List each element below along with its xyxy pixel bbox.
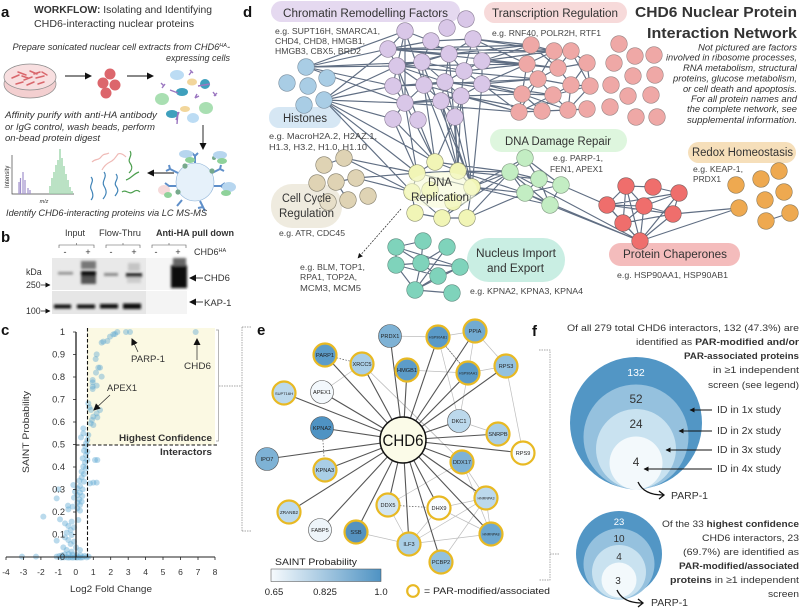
top description: screen (see legend) [708, 380, 799, 390]
panel letter d: d [243, 4, 252, 21]
x axis labels: 3 [126, 567, 131, 577]
arrow: nuclei to extract [127, 75, 153, 77]
bottom description: CHD6 interactors, 23 [702, 533, 799, 543]
SAINT probability legend: 1.0 [374, 587, 388, 598]
node labels: HMGB1 [397, 368, 417, 374]
nodes: nucleus import and export [388, 233, 468, 301]
bottom description [662, 519, 799, 599]
x axis labels: 5 [161, 567, 166, 577]
callouts: Interactors [160, 447, 212, 457]
column headers: CHD6 [194, 247, 219, 257]
node labels: ILF3 [403, 542, 415, 548]
network note: the complete network, see [687, 104, 797, 114]
callouts [94, 339, 212, 457]
node labels: ZRANB2 [280, 510, 299, 515]
bracket to panel e [216, 327, 252, 531]
panel d: interaction network [243, 1, 798, 301]
node labels: PPIA [469, 329, 482, 335]
example protein lists: RPA1, TOP2A, [300, 273, 357, 282]
nested circles: all interactors [570, 357, 702, 490]
nested circles: all interactors: 52 [629, 392, 643, 406]
node labels: XRCC5 [353, 362, 371, 368]
arrow: dish to cells [65, 75, 91, 77]
nodes: protein chaperones [599, 178, 687, 249]
network note: or cell death and apoptosis. [683, 84, 797, 94]
category labels: DNA Damage Repair [505, 136, 611, 148]
arrow: beads to peptides [148, 172, 174, 174]
blot labels: kDa [26, 267, 42, 277]
category labels: Nucleus Import [476, 248, 557, 260]
nested circles: all interactors: 4 [633, 455, 640, 469]
chart: mass spectrum: m/z [40, 199, 49, 205]
x axis labels: -3 [20, 567, 27, 577]
node labels [261, 329, 530, 566]
network edges [306, 31, 790, 293]
step 2 text: Affinity purify with anti-HA antibody [4, 110, 158, 120]
panel f: PAR overlap [532, 323, 799, 609]
category labels: Replication [411, 192, 469, 204]
PARP-1 arrow bottom [617, 590, 688, 609]
x axis labels: 0 [73, 567, 78, 577]
example protein lists: e.g. RNF40, POLR2H, RTF1 [492, 29, 601, 38]
panel a: workflow [1, 4, 236, 218]
node labels: HSP90AB1 [429, 336, 447, 340]
node labels: PRDX1 [381, 334, 399, 340]
bottom description: Of the 33 highest confidence [662, 519, 799, 529]
x axis labels: 2 [108, 567, 113, 577]
column headers: Input [65, 228, 86, 238]
PAR-modified legend: = PAR-modified/associated [424, 586, 550, 597]
nested circles: all interactors: 132 [627, 367, 645, 379]
blot: KAP-1 [52, 291, 187, 314]
column headers: + [175, 247, 181, 257]
PARP-1 arrow top: PARP-1 [671, 490, 708, 502]
column headers: Flow-Thru [99, 228, 141, 238]
node labels: RPS9 [516, 451, 530, 457]
node labels: KPNA3 [316, 468, 334, 474]
blot labels [26, 267, 231, 316]
x axis labels: -4 [2, 567, 10, 577]
example protein lists [269, 27, 743, 296]
axes and ticks [6, 332, 215, 560]
nodes: DNA replication [404, 154, 480, 226]
category labels: DNA [428, 177, 452, 189]
top description: identified as PAR-modified and/or [636, 337, 799, 347]
node labels: DDX17 [453, 460, 471, 466]
nested circles: all interactors: 24 [629, 417, 643, 431]
node labels: DDX5 [381, 503, 395, 509]
x axis labels [2, 567, 218, 577]
blot: CHD6 [52, 258, 187, 290]
example protein lists: e.g. MacroH2A.2, H2AZ.1, [269, 132, 377, 141]
x axis labels: 7 [196, 567, 201, 577]
y axis labels: 0 [60, 552, 65, 562]
column headers: + [131, 247, 137, 257]
arrow: DNA replication examples [358, 209, 401, 258]
protein nodes [256, 324, 470, 542]
network note: proteins, glucose metabolism, [672, 74, 797, 84]
arrow: extract to beads [202, 125, 204, 149]
nodes: redox homeostasis [728, 163, 798, 229]
highest confidence region [87, 328, 215, 445]
blot labels: 100 [26, 306, 41, 316]
icon: nuclei [98, 68, 120, 98]
category labels: Histones [283, 113, 327, 125]
icon: protein extract [155, 70, 217, 124]
y axis title: SAINT Probability [21, 391, 31, 473]
y axis labels: 0.9 [52, 350, 65, 360]
node labels: APEX1 [313, 390, 331, 396]
icon: petri dish [4, 64, 56, 98]
callouts: Highest Confidence [119, 433, 212, 443]
step 3 text: Identify CHD6-interacting proteins via LC MS-MS [6, 208, 208, 218]
category labels: Protein Chaperones [623, 249, 727, 261]
y axis labels: 1 [60, 327, 65, 337]
example protein lists: CHD4, CHD8, HMGB1, [275, 37, 365, 46]
SAINT probability legend: 0.825 [313, 587, 337, 598]
node labels: IPO7 [261, 457, 273, 463]
nested circles: high confidence: 3 [615, 576, 621, 587]
network title: CHD6 Nuclear Protein [635, 4, 797, 21]
workflow heading: CHD6-interacting nuclear proteins [34, 19, 194, 30]
node labels: SNRPB [488, 432, 508, 438]
panel letter f: f [532, 323, 538, 340]
example protein lists: H1.3, H3.2, H1.0, H1.10 [269, 143, 368, 152]
example protein lists: PRDX1 [693, 175, 721, 184]
network title: Interaction Network [647, 25, 798, 42]
top description [567, 323, 799, 390]
bottom description: proteins in ≥1 independent [670, 575, 799, 585]
panel e: CHD6 high confidence network [256, 320, 550, 598]
top description: PAR-associated proteins [684, 351, 799, 361]
network note: Not pictured are factors [698, 42, 797, 52]
column headers: Anti-HA pull down [156, 228, 234, 238]
blot labels: 250 [26, 280, 41, 290]
bracket from panel e [539, 350, 560, 580]
example protein lists: FEN1, APEX1 [550, 165, 603, 174]
nested circles: high confidence: 23 [614, 517, 624, 528]
y axis labels: 0.2 [52, 507, 65, 517]
panel b: western blot [1, 228, 234, 316]
category labels [279, 8, 793, 275]
study arrows and labels: ID in 1x study [717, 405, 781, 416]
step 2 text [4, 110, 158, 143]
node labels: SUPT16H [275, 391, 293, 396]
network note: involved in ribosome processes, [666, 52, 797, 62]
x axis labels: 6 [178, 567, 183, 577]
bottom description: PAR-modified/associated [679, 561, 799, 571]
workflow heading [34, 5, 212, 30]
x axis labels: 4 [143, 567, 148, 577]
x axis labels: -1 [55, 567, 62, 577]
network note: For all protein names and [691, 94, 798, 104]
PAR-modified nodes [272, 320, 534, 574]
example protein lists: e.g. KEAP-1, [693, 165, 743, 174]
PARP-1 arrow bottom: PARP-1 [651, 597, 688, 609]
callouts: CHD6 [184, 361, 211, 372]
step 2 text: or IgG control, wash beads, perform [5, 122, 155, 132]
panel letter b: b [1, 229, 10, 246]
callouts: PARP-1 [131, 354, 165, 365]
nodes: chromatin remodelling [380, 11, 490, 128]
category pills [269, 1, 796, 282]
example protein lists: e.g. HSP90AA1, HSP90AB1 [617, 271, 728, 280]
step 1 text: Prepare sonicated nuclear cell extracts from CHD6 [12, 42, 219, 52]
column headers: - [64, 247, 66, 257]
node labels: HNRNPA8 [483, 532, 499, 536]
category labels: Regulation [279, 208, 334, 220]
study arrows and labels: ID in 4x study [717, 464, 781, 475]
top description: in ≥1 independent [713, 365, 799, 375]
node labels: PARP1 [316, 353, 334, 359]
network note [666, 42, 798, 125]
step 1 text: - [227, 42, 230, 52]
node labels: DHX9 [432, 506, 446, 512]
spokes to CHD6 [267, 331, 523, 562]
column headers: - [154, 247, 158, 257]
blot labels: KAP-1 [204, 298, 231, 309]
SAINT probability legend [265, 557, 388, 598]
threshold lines [76, 328, 217, 557]
nodes: transcription regulation [511, 36, 665, 125]
icon: antibody bead [158, 150, 236, 211]
example protein lists: e.g. KPNA2, KPNA3, KPNA4 [470, 287, 584, 296]
top description: Of all 279 total CHD6 interactors, 132 (47.3%) are [567, 323, 799, 333]
study arrows and labels: ID in 3x study [717, 445, 781, 456]
example protein lists: e.g. PARP-1, [553, 154, 603, 163]
node labels: PCBP2 [432, 560, 450, 566]
callouts: APEX1 [107, 383, 137, 394]
column headers: HA [219, 248, 226, 254]
example protein lists: e.g. ATR, CDC45 [279, 229, 346, 238]
example protein lists: HMGB3, CBX5, BRD2 [275, 47, 361, 56]
workflow heading: WORKFLOW: Isolating and Identifying [34, 5, 212, 16]
category labels: Chromatin Remodelling Factors [283, 8, 448, 20]
panel c: scatter plot [1, 322, 252, 594]
CHD6 hub: CHD6 [382, 431, 424, 450]
panel letter e: e [257, 322, 265, 339]
network note: supplemental information. [687, 115, 797, 125]
y axis labels: 0.7 [52, 394, 65, 404]
secondary edges [322, 331, 523, 562]
chart: mass spectrum: Intensity [5, 166, 11, 188]
dotted interactions [322, 337, 468, 508]
CHD6 hub [380, 417, 426, 463]
bottom description: (69.7%) are identified as [683, 547, 799, 557]
bottom description: screen [768, 589, 799, 599]
node labels: KPNA2 [313, 426, 331, 432]
panel letter a: a [1, 4, 10, 21]
x axis labels: -2 [37, 567, 45, 577]
category labels: Redox Homeostasis [692, 147, 793, 159]
step 1 text: HA [219, 43, 227, 49]
y axis labels [52, 327, 65, 562]
category labels: Transcription Regulation [492, 8, 618, 20]
scatter points [19, 329, 199, 561]
y axis labels: 0.4 [52, 462, 65, 472]
x axis title: Log2 Fold Change [70, 584, 152, 594]
node labels: DKC1 [452, 419, 466, 425]
nested circles: high confidence: 4 [616, 552, 622, 563]
x axis labels: 1 [91, 567, 96, 577]
PARP-1 arrow top [638, 482, 708, 502]
column headers [59, 228, 234, 257]
y axis labels: 0.6 [52, 417, 65, 427]
node labels: HNRNPA3 [478, 496, 494, 500]
panel letter c: c [1, 322, 9, 339]
y axis labels: 0.5 [52, 440, 65, 450]
blot labels: CHD6 [204, 273, 230, 284]
step 2 text: on-bead protein digest [5, 133, 100, 143]
chart: mass spectrum [5, 149, 74, 205]
nested circles: high confidence [576, 511, 662, 600]
nested circles: high confidence: 10 [613, 534, 625, 545]
step 1 text [12, 42, 230, 63]
step 1 text: expressing cells [166, 53, 230, 63]
example protein lists: e.g. SUPT16H, SMARCA1, [275, 27, 380, 36]
example protein lists: MCM3, MCM5 [300, 284, 362, 293]
nodes: histones [279, 59, 335, 113]
example protein lists: e.g. BLM, TOP1, [300, 263, 365, 272]
network note: RNA metabolism, structural [683, 63, 798, 73]
y axis labels: 0.8 [52, 372, 65, 382]
network title [635, 4, 798, 42]
icon: peptides [91, 151, 140, 200]
nodes: DNA damage repair [502, 150, 569, 213]
category labels: and Export [487, 263, 545, 275]
nodes: cell cycle [309, 150, 376, 210]
study arrows and labels [644, 405, 781, 475]
node labels: SSB [350, 530, 362, 536]
y axis labels: 0.1 [52, 530, 65, 540]
SAINT probability legend: 0.65 [265, 587, 283, 598]
y axis labels: 0.3 [52, 484, 65, 494]
node labels: FABP5 [311, 528, 329, 534]
column headers: + [85, 247, 91, 257]
category labels: Cell Cycle [282, 193, 331, 205]
column headers: - [110, 247, 112, 257]
DNA replication blob [405, 172, 477, 208]
study arrows and labels: ID in 2x study [717, 426, 781, 437]
node labels: RPS3 [499, 364, 513, 370]
node labels: HSP90AA1 [459, 372, 477, 376]
x axis labels: 8 [213, 567, 218, 577]
SAINT probability legend: SAINT Probability [275, 557, 357, 568]
